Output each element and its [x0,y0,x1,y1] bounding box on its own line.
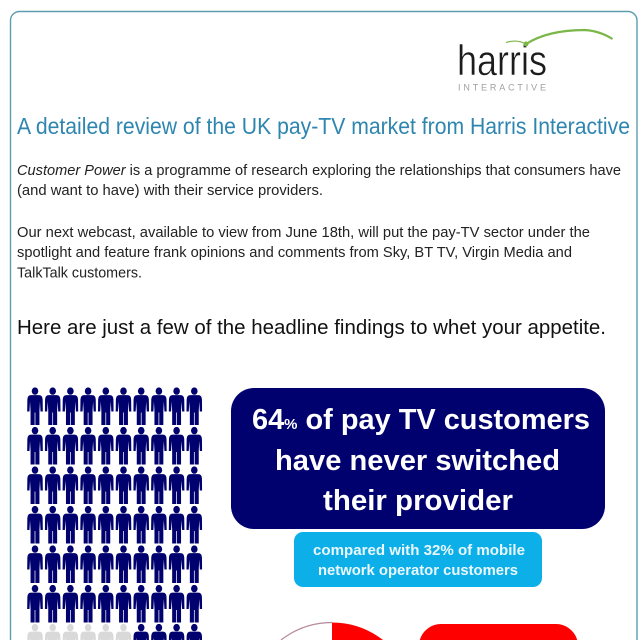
intro text block: (and want to have) with their service providers. [17,183,323,199]
callout text: have never switched [275,445,560,477]
callout: 64% headline [231,388,605,529]
logo tagline: INTERACTIVE [458,82,546,92]
logo green swoosh [506,30,612,46]
pie red slice [332,622,383,640]
webcast text block: TalkTalk customers. [17,266,142,282]
logo wordmark: harris [457,37,547,85]
webcast text block: Our next webcast, available to view from June 18th, will put the pay-TV sector under the [17,225,590,241]
callout text: 64% of pay TV customers [252,404,590,436]
callout: red box [420,624,577,640]
subheading: Here are just a few of the headline findings to whet your appetite. [17,317,606,339]
intro text block [17,163,621,199]
comparison text: network operator customers [318,562,518,579]
comparison text [313,542,525,579]
webcast text block: spotlight and feature frank opinions and comments from Sky, BT TV, Virgin Media and [17,245,572,261]
intro text block: Customer Power is a programme of research exploring the relationships that consumers have [17,163,621,179]
pie chart [281,622,383,640]
pictogram: people, 64 of 100 [27,387,202,640]
logo: Harris Interactive [457,30,612,92]
callout text: their provider [323,485,513,517]
comparison text: compared with 32% of mobile [313,542,525,559]
webcast text block [17,225,590,282]
callout: mobile comparison [294,532,542,587]
callout text [252,404,590,517]
